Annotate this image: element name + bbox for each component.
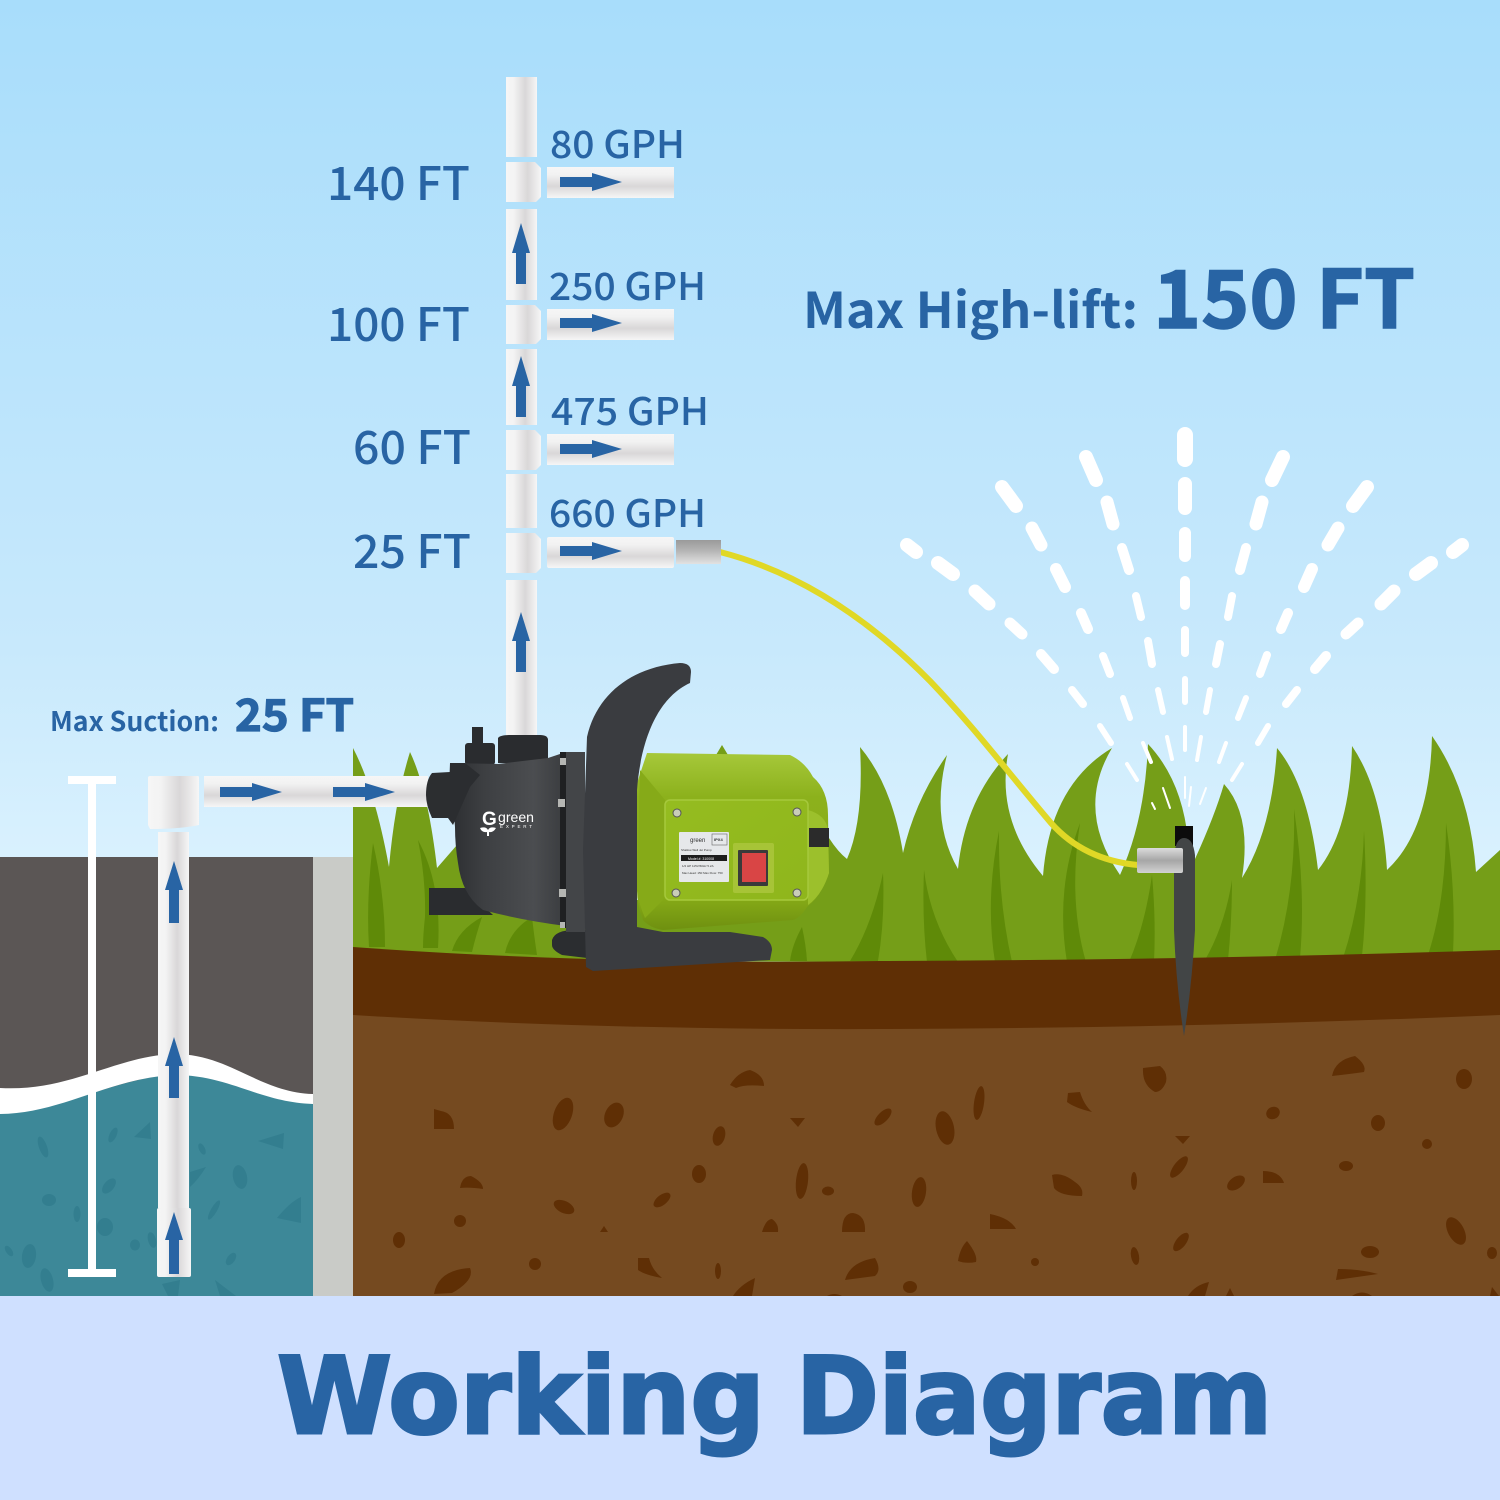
suction depth bracket bbox=[68, 776, 116, 1277]
max suction callout bbox=[50, 680, 354, 744]
concrete well wall bbox=[313, 857, 353, 1296]
spec label: Shallow Well Jet Pump bbox=[681, 848, 712, 852]
max high-lift callout: 150 FT bbox=[1153, 236, 1415, 352]
grass bbox=[353, 736, 1500, 965]
soil: dark topsoil layer bbox=[353, 947, 1500, 1040]
max suction callout: 25 FT bbox=[235, 680, 354, 744]
pump motor bbox=[637, 753, 829, 930]
height label: 25 FT: 25 FT bbox=[353, 516, 471, 582]
water surface line bbox=[0, 1054, 313, 1114]
screws bbox=[672, 808, 801, 897]
spec label: IPX4 bbox=[714, 837, 723, 842]
clips bbox=[558, 758, 566, 928]
sprinkler stake bbox=[1137, 826, 1195, 1036]
flow label: 80 GPH: 80 GPH bbox=[550, 114, 685, 169]
soil: lower earth with rocks bbox=[353, 1015, 1500, 1296]
riser pipe with branches bbox=[506, 77, 674, 740]
inlet port bbox=[426, 772, 450, 818]
flow label: 475 GPH: 475 GPH bbox=[551, 381, 709, 436]
title band bbox=[0, 1296, 1500, 1500]
outlet hose connector bbox=[676, 540, 721, 564]
water pump bbox=[426, 663, 829, 971]
max high-lift callout: Max High-lift: bbox=[803, 272, 1138, 343]
spec label: Max Head: 150 Max Flow: 750 bbox=[682, 871, 723, 875]
pump handle and stand bbox=[583, 663, 772, 971]
pump base foot bbox=[552, 930, 587, 958]
water spray bbox=[907, 435, 1462, 809]
branch pipes bbox=[547, 167, 674, 568]
riser arrows bbox=[512, 173, 622, 672]
housing logo bbox=[480, 809, 534, 836]
pump housing bbox=[450, 752, 585, 932]
height label: 100 FT: 100 FT bbox=[327, 289, 470, 355]
water speckles bbox=[3, 1122, 301, 1296]
grass: dark blades bbox=[368, 809, 1454, 962]
housing logo: EXPERT bbox=[500, 824, 532, 829]
suction pipe assembly bbox=[148, 776, 428, 1277]
sprinkler connector bbox=[1137, 848, 1183, 873]
title bbox=[277, 1335, 1272, 1458]
spec label: Model #: 310008 bbox=[688, 857, 714, 861]
flow label: 660 GPH: 660 GPH bbox=[549, 483, 706, 538]
hose bbox=[720, 552, 1138, 865]
lower port bbox=[429, 888, 493, 915]
height label: 140 FT: 140 FT bbox=[327, 148, 470, 214]
spec label: 1/2 HP 115V/60Hz 5.2A bbox=[682, 864, 714, 868]
motor control panel bbox=[665, 800, 808, 900]
housing logo: green bbox=[498, 809, 534, 825]
water bbox=[0, 1074, 313, 1296]
well: rock wall, water and concrete bbox=[0, 857, 353, 1296]
height label: 60 FT: 60 FT bbox=[353, 412, 471, 478]
title: Working bbox=[277, 1335, 765, 1458]
max high-lift callout bbox=[803, 236, 1415, 352]
max suction callout: Max Suction: bbox=[50, 700, 219, 739]
suction arrows bbox=[165, 783, 395, 1274]
spec label bbox=[679, 832, 729, 882]
tee fittings bbox=[506, 162, 541, 573]
power switch bbox=[733, 843, 774, 893]
top ports bbox=[465, 727, 548, 765]
flow label: 250 GPH: 250 GPH bbox=[549, 256, 706, 311]
housing logo: G bbox=[482, 809, 497, 830]
housing flange bbox=[566, 752, 585, 932]
soil rocks bbox=[393, 1056, 1499, 1296]
housing front wedge bbox=[448, 763, 480, 825]
title: Diagram bbox=[796, 1335, 1272, 1458]
spec label: green bbox=[690, 838, 705, 844]
